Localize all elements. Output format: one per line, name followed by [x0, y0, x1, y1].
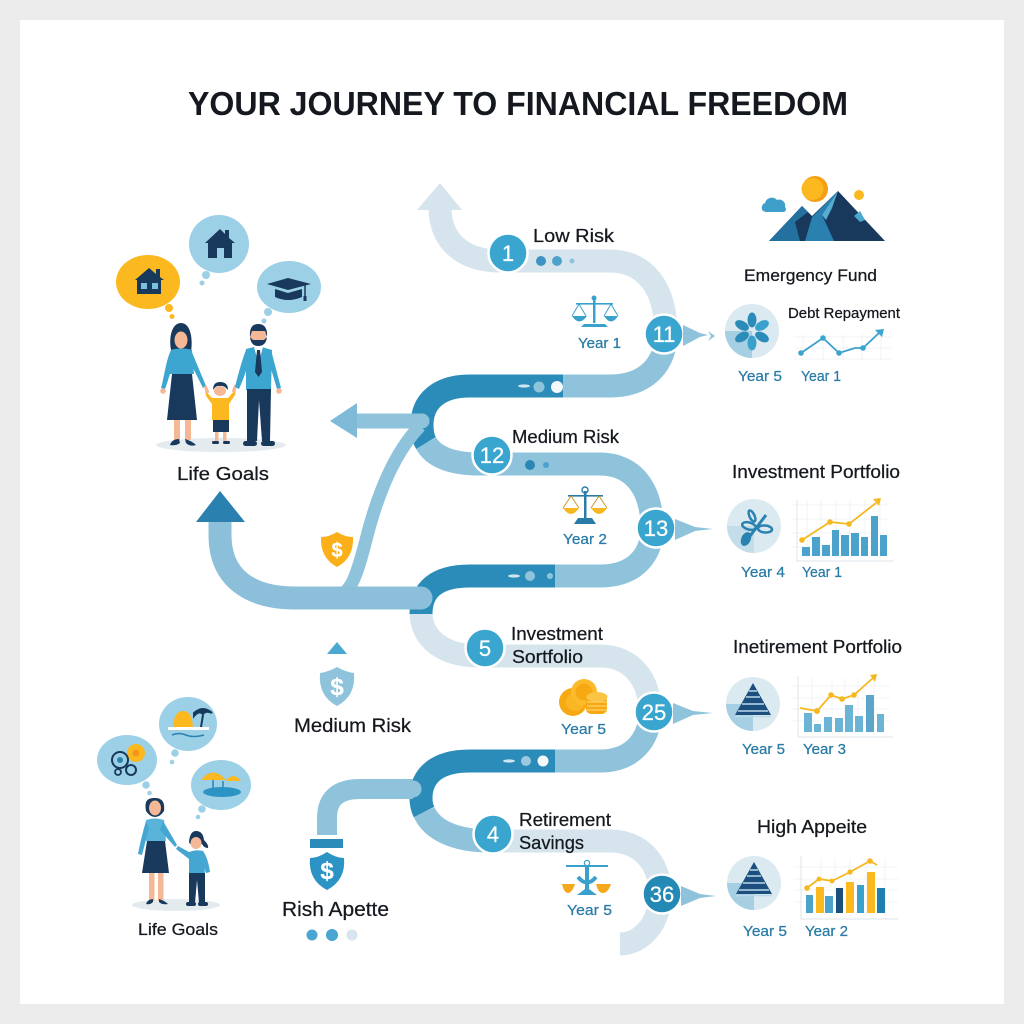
icon: pyramid disc lower	[727, 856, 781, 910]
step marker 4	[474, 814, 512, 854]
arrow: step 11 to emergency fund	[683, 325, 715, 346]
label: retirement savings: Savings	[519, 833, 584, 853]
step marker 13	[636, 508, 676, 548]
labels: year 5, year 1	[738, 368, 841, 385]
labels: year 5, year 3: Year 5	[742, 741, 785, 758]
path segment: lower dark bend	[421, 761, 555, 812]
label: investment sortfolio	[511, 624, 603, 667]
icon: balance scale, year 1	[572, 296, 618, 327]
icon: risk appetite shield: $	[320, 858, 334, 885]
label: coins year 5: Year 5	[561, 721, 606, 738]
path segment: year one return	[563, 334, 666, 386]
icon: balance scale, year 2	[563, 487, 607, 524]
title: YOUR JOURNEY TO FINANCIAL FREEDOM	[188, 86, 848, 123]
arrow: top exit	[417, 183, 500, 261]
icon: yellow dollar shield	[321, 532, 353, 567]
chart: investment portfolio	[792, 498, 894, 561]
arrow: step 36 to high appetite	[681, 886, 716, 906]
icon: mountain with sun	[762, 176, 885, 241]
winding journey path	[417, 183, 666, 944]
chart: retirement portfolio	[792, 674, 893, 737]
icon: yellow dollar shield: $	[331, 540, 343, 562]
label: medium risk: Medium Risk	[512, 427, 620, 447]
child figure	[176, 831, 210, 906]
icon: anchor scale	[562, 860, 611, 895]
icon: up triangle	[327, 642, 347, 654]
thought bubble: graduation cap	[257, 261, 321, 324]
labels: year 4, year 1: Year 4	[741, 564, 785, 581]
step marker 5	[466, 628, 504, 668]
path segment: middle dark bend	[421, 576, 555, 614]
label: anchor year 5: Year 5	[567, 902, 612, 919]
label: year 1: Year 1	[578, 335, 621, 352]
thought bubble: blue house	[189, 215, 249, 286]
label: medium risk: Medium Risk	[294, 716, 412, 737]
label: investment sortfolio: Investment	[511, 624, 603, 644]
labels: year 4, year 1	[741, 564, 842, 581]
icon: gold coins	[559, 679, 608, 716]
thought bubble: island umbrellas	[191, 760, 251, 819]
label: low risk: Low Risk	[533, 226, 615, 246]
arrow: step 25 to retirement portfolio	[673, 703, 713, 724]
illustration: family with child	[156, 323, 286, 452]
icon: pale dollar shield: $	[330, 674, 344, 701]
icon: pale dollar shield	[320, 667, 354, 706]
step marker 12	[472, 436, 512, 474]
thought bubble: beach sun and palm	[159, 697, 217, 764]
step marker 25: 25	[642, 700, 666, 725]
step marker 12: 12	[480, 443, 504, 468]
labels: year 5, year 2: Year 2	[805, 923, 848, 940]
label: investment sortfolio: Sortfolio	[512, 647, 583, 667]
man figure	[235, 324, 282, 446]
step marker 4: 4	[487, 822, 499, 847]
step marker 36: 36	[650, 882, 674, 907]
arrow: large up arrow to life goals	[196, 491, 421, 598]
label: inetirement portfolio: Inetirement Portfolio	[733, 637, 902, 657]
path segment: medium risk	[426, 443, 652, 576]
child figure	[205, 382, 236, 444]
label: emergency fund: Emergency Fund	[744, 266, 877, 285]
chart: high appetite	[794, 856, 898, 919]
label: year 2: Year 2	[563, 531, 607, 548]
step marker 13: 13	[644, 516, 668, 541]
icon: risk appetite shield	[310, 839, 344, 890]
progress dots on path	[503, 256, 574, 766]
label: investment portfolio: Investment Portfolio	[732, 462, 900, 482]
label: retirement savings	[519, 810, 611, 853]
path segment: investment portfolio	[421, 612, 650, 712]
label: high appeite: High Appeite	[757, 817, 867, 837]
icon: flower disc	[725, 304, 779, 358]
labels: year 5, year 3: Year 3	[803, 741, 846, 758]
path segment: low risk	[500, 261, 666, 334]
label: life goals top: Life Goals	[177, 464, 269, 484]
step marker 11	[644, 314, 684, 354]
labels: year 5, year 2: Year 5	[743, 923, 787, 940]
label: debt repayment: Debt Repayment	[788, 306, 900, 322]
step marker 1	[488, 234, 528, 272]
ground shadow	[156, 438, 286, 452]
thought bubble: gears and sun	[97, 735, 157, 795]
labels: year 5, year 1: Year 1	[801, 368, 841, 385]
step marker 25	[634, 692, 674, 732]
ground shadow	[132, 899, 220, 911]
path segment: retirement savings	[493, 841, 660, 944]
icon: percent leaves disc	[727, 499, 781, 553]
step marker 36	[642, 874, 682, 914]
step marker 5: 5	[479, 636, 491, 661]
parent figure	[138, 798, 177, 904]
path segment: upper dark bend	[422, 386, 563, 443]
labels: year 5, year 3	[742, 741, 846, 758]
label: rish apette: Rish Apette	[282, 899, 389, 921]
labels: year 5, year 1: Year 5	[738, 368, 782, 385]
labels: year 4, year 1: Year 1	[802, 564, 842, 581]
chart: debt repayment line	[794, 329, 891, 361]
path segment: year five return	[555, 712, 650, 761]
labels: year 5, year 2	[743, 923, 848, 940]
thought bubble: yellow house	[116, 255, 180, 319]
label: life goals bottom: Life Goals	[138, 920, 218, 939]
label: retirement savings: Retirement	[519, 810, 611, 830]
arrow: risk appetite feed pipe	[327, 789, 413, 835]
step marker 11: 11	[653, 322, 675, 347]
icon: pyramid disc	[726, 677, 780, 731]
illustration: parent with child	[132, 798, 220, 911]
step marker 1: 1	[502, 241, 514, 266]
path segment: lower bend	[424, 812, 500, 841]
arrow: branch to left goal	[330, 403, 422, 597]
arrow: step 13 to investment portfolio	[675, 519, 713, 540]
progress dots: risk appetite	[306, 929, 358, 941]
woman figure	[160, 323, 206, 446]
